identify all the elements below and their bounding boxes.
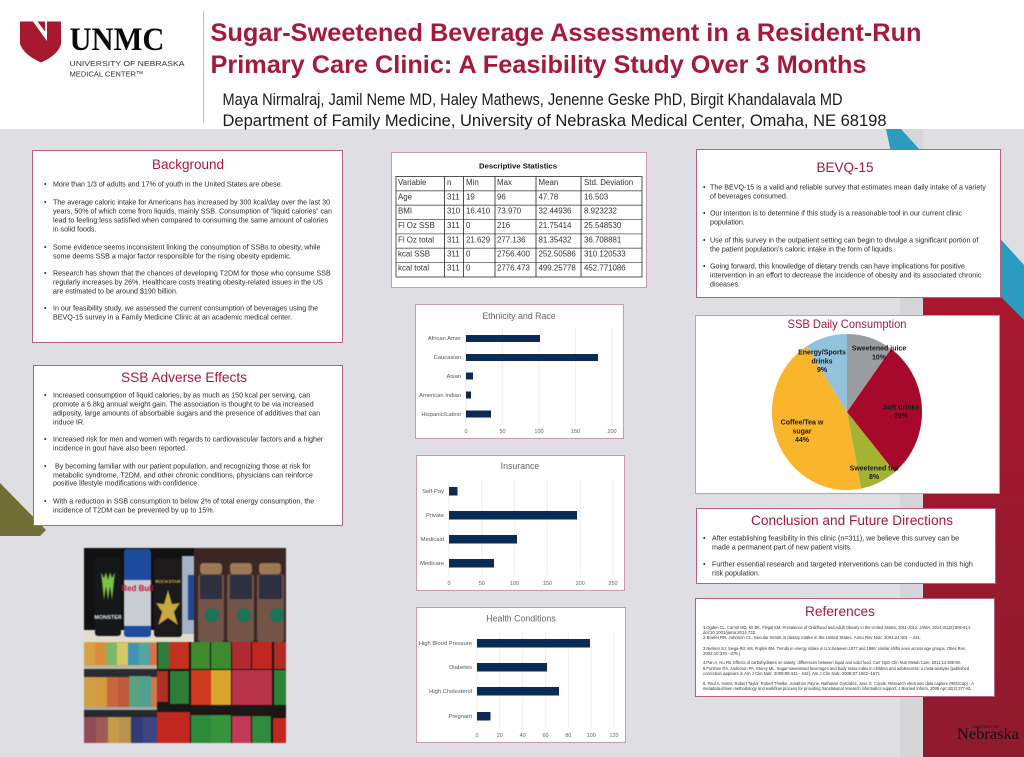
axis labels: health conditions: 60 xyxy=(542,733,549,739)
text: Background bullets: More than 1/3 of adults and 17% of youth in the United States are obese. xyxy=(53,180,283,188)
pie labels: Sweetened tea xyxy=(850,466,898,472)
table values: 277.136 xyxy=(497,236,526,244)
text: conclusion bullets: made a permanent part of new patient visits. xyxy=(712,544,852,552)
heading: BEVQ-15: BEVQ-15 xyxy=(816,159,874,175)
bars: ethnicity xyxy=(466,335,598,418)
category labels: ethnicity: American Indian xyxy=(419,393,461,399)
table values: 73.970 xyxy=(497,206,522,216)
pie labels: 9% xyxy=(817,367,828,374)
panel: BEVQ-15 xyxy=(696,150,1000,298)
text: adverse effects bullets: metabolic syndrome, T2DM, and other chronic conditions, physicians can reinforce xyxy=(53,472,313,480)
axis labels: health conditions xyxy=(475,733,619,739)
text: Background bullets: Research has shown that the chances of developing T2DM for those who consume SSB xyxy=(53,270,331,278)
text: adverse effects bullets: Increased consumption of liquid calories, by as much as 150 kcal per serving, can xyxy=(53,392,310,400)
table values: 452.771086 xyxy=(584,264,626,272)
authors and affiliation xyxy=(222,91,886,130)
text: BEVQ-15 bullets: population. xyxy=(710,218,745,226)
table values: kcal total xyxy=(398,264,429,272)
text: adverse effects bullets: By becoming familiar with our patient population, and recognizing those at risk for xyxy=(55,462,311,470)
photo: sugary drinks collage: MONSTER xyxy=(94,615,122,621)
axis labels: health conditions: 0 xyxy=(475,733,479,739)
axis labels: health conditions: 100 xyxy=(587,733,596,739)
pie labels: 8% xyxy=(869,474,880,481)
text: BEVQ-15 bullets: intervention in an effort to decrease the incidence of obesity and its associated chronic xyxy=(710,272,982,280)
axis labels: ethnicity: 0 xyxy=(464,429,468,435)
table values: n xyxy=(447,178,451,187)
text: adverse effects bullets: incidence in gout have also been reported. xyxy=(53,444,187,452)
header logo: UNMC xyxy=(20,22,186,78)
title xyxy=(210,19,922,79)
text: Background bullets: Some evidence seems inconsistent linking the consumption of SSBs to obesity, while xyxy=(53,244,320,252)
text: adverse effects bullets: incidence of T2DM can be prevented by up to 15%. xyxy=(53,506,215,514)
category labels: insurance: Private xyxy=(426,513,444,519)
heading: SSB Daily Consumption: SSB Daily Consumption xyxy=(788,317,906,331)
text: BEVQ-15 bullets: • xyxy=(703,236,706,244)
text: BEVQ-15 bullets: Use of this survey in the outpatient setting can begin to divulge a significant portion of xyxy=(710,236,978,244)
axis labels: insurance: 0 xyxy=(447,581,451,587)
pie labels: 10% xyxy=(872,354,887,362)
axis labels: insurance: 150 xyxy=(543,581,552,587)
logo: University of Nebraska: MEDICAL CENTER xyxy=(972,742,1003,746)
heading: Conclusion and Future Directions: Conclusion and Future Directions xyxy=(751,512,953,528)
text: Background bullets: BEVQ-15 survey in a Family Medicine Clinic at an academic medical center. xyxy=(53,314,292,322)
header logo: UNMC: MEDICAL CENTER™ xyxy=(70,70,144,78)
logo: University of Nebraska: Nebraska xyxy=(957,726,1019,743)
bars: health conditions xyxy=(477,639,590,720)
header logo: UNMC: UNMC xyxy=(70,22,164,58)
table values: Max xyxy=(497,178,512,187)
text: reference list: correction appears in Am J Clin Nutr. 2009;89:441– 442]. Am J Clin Nutr. 2008;87:1662–1671 xyxy=(703,671,881,676)
table values: 216 xyxy=(497,221,511,230)
title: Sugar-Sweetened Beverage Assessment in a Resident-Run xyxy=(210,19,922,47)
table values: BMI xyxy=(398,206,412,216)
table values: Variable xyxy=(398,178,427,187)
header logo: UNMC: UNIVERSITY OF NEBRASKA xyxy=(70,59,186,68)
table values: 81.35432 xyxy=(538,236,571,244)
heading: Ethnicity and Race: Ethnicity and Race xyxy=(482,311,556,321)
category labels: health conditions xyxy=(419,641,472,720)
table values: 21.629 xyxy=(466,236,491,244)
text: reference list: 4.Pan A, Hu FB. Effects of carbohydrates on satiety: differences between liquid and solid food. Curr Opin Clin Nutr Metab Care. 2011;14:385-90. xyxy=(703,660,961,665)
heading: Background: Background xyxy=(152,156,224,172)
table values: 0 xyxy=(466,250,471,258)
table values: 311 xyxy=(447,250,460,258)
category labels: insurance: Medicare xyxy=(420,561,444,567)
table values xyxy=(398,178,633,272)
text: adverse effects bullets: Increased risk for men and women with regards to cardiovascular factors and a higher xyxy=(53,436,324,444)
text: Background bullets: • xyxy=(44,244,47,252)
text: reference list: doi:10.1001/jama.2014.732. xyxy=(703,630,756,635)
text: adverse effects bullets: With a reduction in SSB consumption to below 2% of total energy consumption, the xyxy=(53,498,314,506)
axis labels: insurance: 250 xyxy=(608,581,618,587)
text: Background bullets: regularly increases by 26%. Healthcare costs treating obesity-related issues in the US xyxy=(53,278,323,286)
text: BEVQ-15 bullets: • xyxy=(703,262,706,270)
table values: 8.923232 xyxy=(584,206,617,216)
text: Background bullets: • xyxy=(44,180,47,188)
text: Background bullets: lead to feeling less satisfied when compared to consuming the same amount of calories xyxy=(53,216,328,224)
heading: Health Conditions: Health Conditions xyxy=(486,614,556,624)
table values: Fl Oz SSB xyxy=(398,221,435,230)
table values: 311 xyxy=(447,221,460,230)
pie labels: drinks xyxy=(811,358,833,366)
axis labels: ethnicity: 150 xyxy=(571,429,580,435)
category labels: ethnicity: Hispanic/Latino xyxy=(421,412,461,418)
text: Background bullets: some deems SSB a major factor responsible for the rising obesity epidemic. xyxy=(53,252,292,260)
table values: Age xyxy=(398,192,413,202)
photo: sugary drinks collage: Red Bull xyxy=(121,584,154,593)
pie labels: Soft drinks xyxy=(883,404,919,412)
panel: Background xyxy=(32,150,342,342)
table values: Mean xyxy=(538,178,558,187)
text: reference list: metadata-driven methodology and workflow process for providing translational research informatics support, J Biomed Inform. 2009 Apr;42(2):377-81. xyxy=(703,686,972,691)
pie labels: sugar xyxy=(792,428,812,436)
table values: 2756.400 xyxy=(497,250,531,258)
table grid xyxy=(396,176,642,277)
pie labels: 29% xyxy=(894,413,909,420)
axis labels: insurance: 50 xyxy=(479,581,485,587)
category labels: insurance: Medicaid xyxy=(421,537,444,543)
table values: 0 xyxy=(466,221,471,230)
text: reference list xyxy=(703,625,974,691)
table values: 32.44936 xyxy=(538,206,572,216)
panel: SSB Daily Consumption pie chart xyxy=(696,316,1000,494)
table values: 2776.473 xyxy=(497,264,531,272)
text: reference list: 5.Forshee RA, Anderson PA, Storey ML. Sugar-sweetened beverages and body mass index in children and adolescents: a meta-analysis [published xyxy=(703,666,970,671)
axis labels: insurance: 200 xyxy=(576,581,585,587)
text: conclusion bullets: After establishing feasibility in this clinic (n=311), we believe this survey can be xyxy=(712,534,959,542)
category labels: health conditions: High Cholesterol xyxy=(429,689,472,695)
pie labels: 44% xyxy=(795,437,810,444)
table values: 310.120533 xyxy=(584,250,626,258)
category labels: health conditions: High Blood Pressure xyxy=(419,641,472,647)
text: conclusion bullets: • xyxy=(703,560,706,568)
text: conclusion bullets: risk population. xyxy=(712,570,760,578)
text: Background bullets: • xyxy=(44,198,47,206)
text: reference list: 1.Ogden CL, Carroll MD, Kit BK, Flegal KM. Prevalence of Childhood and Adult Obesity in the United States, 2011-2012. JAMA. 2014;311(8):806-814. xyxy=(703,625,971,630)
text: adverse effects bullets: • xyxy=(44,498,47,506)
text: conclusion bullets: Further essential research and targeted interventions can be conducted in this high xyxy=(712,560,973,568)
panel: SSB Adverse Effects xyxy=(34,366,342,526)
text: BEVQ-15 bullets: • xyxy=(703,210,706,218)
heading: SSB Adverse Effects: SSB Adverse Effects xyxy=(121,369,247,385)
axis labels: health conditions: 40 xyxy=(520,733,526,739)
panel: Ethnicity and Race chart xyxy=(416,304,624,438)
text: BEVQ-15 bullets xyxy=(703,184,986,288)
text: adverse effects bullets: induce IR. xyxy=(53,418,85,426)
table values: 499.25778 xyxy=(538,264,576,272)
table values: 311 xyxy=(447,192,460,202)
logo: University of Nebraska: UNIVERSITY OF xyxy=(972,725,999,729)
text: reference list: 2.Briefel RR, Johnson CL. Secular trends in dietary intake in the United States. Annu Rev Nutr. 2004;24:401 – 431. xyxy=(703,635,921,640)
authors and affiliation: Maya Nirmalraj, Jamil Neme MD, Haley Mathews, Jenenne Geske PhD, Birgit Khandalavala MD xyxy=(222,91,843,109)
table values: 96 xyxy=(497,192,506,202)
panel: Conclusion and Future Directions xyxy=(696,508,996,584)
text: BEVQ-15 bullets: diseases. xyxy=(710,280,740,288)
text: adverse effects bullets: adiposity, large amounts of absorbable sugars and the presence of additives that can xyxy=(53,410,320,418)
category labels: insurance xyxy=(420,489,444,567)
text: Background bullets: in solid foods. xyxy=(53,226,96,234)
table values: 252.50586 xyxy=(538,250,576,258)
text: adverse effects bullets: • xyxy=(44,392,47,400)
table values: 16.503 xyxy=(584,192,609,202)
category labels: ethnicity: Asian xyxy=(446,374,461,380)
category labels: ethnicity xyxy=(419,336,461,418)
pie labels: Coffee/Tea w xyxy=(781,420,824,426)
title: Primary Care Clinic: A Feasibility Study Over 3 Months xyxy=(210,51,866,79)
authors and affiliation: Department of Family Medicine, University of Nebraska Medical Center, Omaha, NE 68198 xyxy=(222,112,886,130)
axis labels: health conditions: 80 xyxy=(565,733,571,739)
pie slices xyxy=(772,334,922,490)
category labels: ethnicity: African Amer xyxy=(428,336,461,342)
heading: Insurance: Insurance xyxy=(501,461,539,471)
text: BEVQ-15 bullets: the patient population’s caloric intake in the form of liquids. xyxy=(710,246,894,254)
pie labels: Energy/Sports xyxy=(798,350,846,356)
table values: kcal SSB xyxy=(398,250,430,258)
text: BEVQ-15 bullets: The BEVQ-15 is a valid and reliable survey that estimates mean daily intake of a variety xyxy=(710,184,986,192)
table values: 47.78 xyxy=(538,192,559,202)
axis labels: ethnicity: 200 xyxy=(607,429,617,435)
text: reference list: 2002;10:370 –378.) xyxy=(703,651,741,656)
text: Background bullets: are estimated to be around $190 billion. xyxy=(53,288,178,296)
table values: 36.708881 xyxy=(584,236,621,244)
axis labels: ethnicity: 100 xyxy=(534,429,544,435)
axis labels: ethnicity: 50 xyxy=(499,429,506,435)
text: Background bullets: • xyxy=(44,270,47,278)
text: reference list: 3.Nielsen SJ, Siega-Riz AM, Popkin BM. Trends in energy intake in U.S.between 1977 and 1996: similar shifts seen across age groups. Obes Res. xyxy=(703,646,966,651)
panel: Descriptive Statistics table xyxy=(392,152,646,288)
text: Background bullets: • xyxy=(44,304,47,312)
table values: 311 xyxy=(447,264,460,272)
text: BEVQ-15 bullets: Our intention is to determine if this study is a reasonable tool in our current clinic xyxy=(710,210,963,218)
pie labels xyxy=(781,346,919,481)
text: adverse effects bullets: positive lifestyle modifications with confidence. xyxy=(53,480,199,488)
table values: Min xyxy=(466,178,479,187)
pie labels: Sweetened juice xyxy=(852,346,906,352)
text: BEVQ-15 bullets: • xyxy=(703,184,706,192)
axis labels: health conditions: 20 xyxy=(497,733,503,739)
text: adverse effects bullets xyxy=(44,392,324,514)
text: Background bullets xyxy=(44,180,332,322)
heading: References: References xyxy=(805,603,875,619)
axis labels: ethnicity xyxy=(464,429,617,435)
text: BEVQ-15 bullets: Going forward, this knowledge of dietary trends can have implications for positive xyxy=(710,262,965,270)
category labels: ethnicity: Caucasian xyxy=(434,355,461,361)
text: conclusion bullets xyxy=(703,534,973,578)
table values: Std. Deviation xyxy=(584,178,633,187)
panel: Health Conditions chart xyxy=(416,608,626,742)
bars: insurance xyxy=(449,487,577,568)
table values: 0 xyxy=(466,264,471,272)
table values: 16.410 xyxy=(466,206,491,216)
text: BEVQ-15 bullets: of beverages consumed. xyxy=(710,192,788,200)
text: reference list: 6. Paul A. Harris, Robert Taylor, Robert Thielke, Jonathon Payne, Nathaniel Gonzalez, Jose G. Conde, Research electronic data capture (REDCap) - A xyxy=(703,681,974,686)
table values: 21.75414 xyxy=(538,221,572,230)
text: Background bullets: The average caloric intake for Americans has increased by 300 kcal/day over the last 30 xyxy=(53,198,330,206)
panel: Insurance chart xyxy=(416,456,624,590)
text: Background bullets: years, 50% of which come from liquids, mainly SSB. Consumption of “liquid calories” can xyxy=(53,208,332,216)
heading: Descriptive Statistics: Descriptive Statistics xyxy=(479,162,557,170)
table values: Fl Oz total xyxy=(398,236,434,244)
table values: 310 xyxy=(447,206,461,216)
axis labels: insurance xyxy=(447,581,618,587)
table values: 311 xyxy=(447,236,460,244)
photo: sugary drinks collage xyxy=(84,548,286,743)
text: conclusion bullets: • xyxy=(703,534,706,542)
category labels: health conditions: Diabetes xyxy=(449,665,472,671)
text: adverse effects bullets: • xyxy=(44,436,47,444)
table values: 25.548530 xyxy=(584,221,622,230)
text: adverse effects bullets: • xyxy=(44,462,47,470)
category labels: insurance: Self-Pay xyxy=(422,489,444,495)
photo: sugary drinks collage: ROCKSTAR xyxy=(155,579,181,584)
category labels: health conditions: Pregnant xyxy=(448,714,472,720)
axis labels: insurance: 100 xyxy=(510,581,519,587)
panel: References xyxy=(696,598,994,696)
text: Background bullets: In our feasibility study, we assessed the current consumption of beverages using the xyxy=(53,304,318,312)
axis labels: health conditions: 120 xyxy=(609,733,619,739)
text: adverse effects bullets: promote a 6.8kg annual weight gain. The association is thought to be via increased xyxy=(53,400,314,408)
table values: 19 xyxy=(466,192,475,202)
